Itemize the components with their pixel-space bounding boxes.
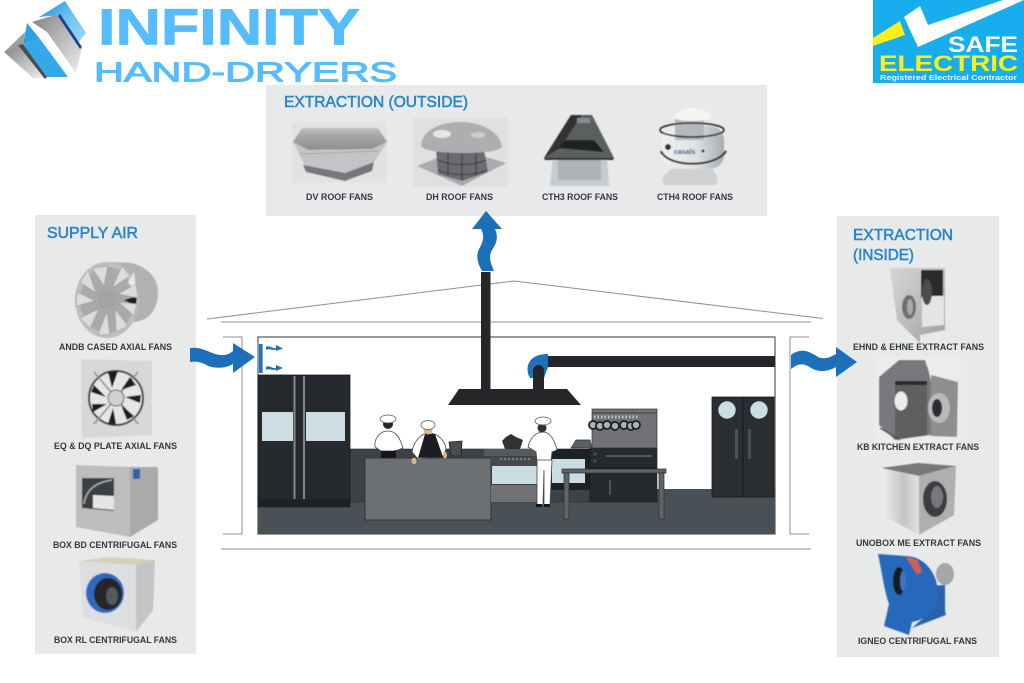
fan: DH roof fan [413, 118, 508, 187]
kettle [449, 441, 462, 456]
fan: Box BD centrifugal [76, 465, 158, 537]
fan: CTH4 roof fan [660, 108, 726, 185]
chef 1 [375, 415, 403, 458]
label: ANDB cased axial fans: ANDB CASED AXIAL FANS [59, 342, 172, 353]
logo wordmark: HAND-DRYERS: HAND-DRYERS [94, 56, 397, 88]
arrow: extraction to outside [472, 211, 502, 271]
panel: extraction outside [266, 85, 767, 216]
heading: supply air: SUPPLY AIR [47, 225, 138, 242]
label: Igneo centrifugal fans: IGNEO CENTRIFUGAL FANS [858, 636, 977, 647]
backsplash with utensils [589, 409, 657, 448]
yellow spark [873, 21, 905, 46]
horizontal extraction duct [547, 356, 775, 367]
stove and oven [484, 449, 538, 502]
fan: Igneo centrifugal [878, 554, 954, 635]
chef 2 [411, 420, 447, 464]
label: EQ and DQ plate axial fans: EQ & DQ PLATE AXIAL FANS [54, 441, 177, 452]
panel: extraction inside [837, 216, 999, 657]
blue duct elbow [528, 354, 548, 378]
kitchen illustration [258, 272, 775, 534]
fan: EQ and DQ plate axial [81, 359, 152, 438]
chef 3 [528, 417, 557, 507]
pot [502, 434, 523, 449]
label: CTH3 roof fans: CTH3 ROOF FANS [542, 192, 618, 203]
label: EHND and EHNE extract fans: EHND & EHNE EXTRACT FANS [853, 342, 984, 353]
back counter [350, 449, 590, 502]
fan: CTH4 roof fan: casals [674, 149, 696, 156]
registered contractor line: Registered Electrical Contractor [880, 73, 1017, 82]
exhaust stack [481, 272, 490, 390]
tick mark [904, 0, 1024, 47]
label: CTH4 roof fans: CTH4 ROOF FANS [657, 192, 733, 203]
countertop appliance [571, 440, 592, 448]
fan: Box RL centrifugal [79, 557, 155, 632]
label: Box BD centrifugal fans: BOX BD CENTRIFUGAL FANS [53, 540, 177, 551]
steel table [562, 469, 666, 519]
logo: Safe Electric [873, 0, 1024, 83]
logo: Infinity Hand-Dryers [4, 0, 397, 88]
label: DV roof fans: DV ROOF FANS [306, 192, 373, 203]
fan: CTH3 roof fan [544, 115, 614, 186]
fan: ANDB cased axial [75, 262, 158, 338]
vertical duct drop [533, 365, 544, 390]
heading: extraction outside: EXTRACTION (OUTSIDE) [284, 94, 468, 111]
label: KB kitchen extract fans: KB KITCHEN EXTRACT FANS [857, 442, 979, 453]
double doors [712, 397, 774, 497]
arrow: supply air in [190, 343, 255, 373]
logo wordmark: INFINITY: INFINITY [98, 0, 360, 56]
fan: KB kitchen extract [875, 356, 961, 443]
label: Box RL centrifugal fans: BOX RL CENTRIFUGAL FANS [54, 635, 177, 646]
extractor hood [448, 389, 581, 405]
label: DH roof fans: DH ROOF FANS [426, 192, 493, 203]
ELECTRIC: ELECTRIC [879, 51, 1018, 76]
label: Unobox ME extract fans: UNOBOX ME EXTRACT FANS [856, 538, 981, 549]
arrow: extraction inside out [791, 347, 857, 377]
SAFE: SAFE [948, 32, 1018, 57]
room outline [258, 337, 775, 534]
cabinet and window right [549, 448, 657, 502]
heading: inside line 2: (INSIDE) [853, 247, 914, 264]
refrigerator [258, 375, 350, 507]
kitchen island [365, 458, 491, 520]
floor [258, 489, 774, 534]
panel: supply air [35, 215, 196, 654]
fan: Unobox ME extract [881, 463, 956, 535]
supply vent bar [259, 344, 263, 373]
fan: EHND and EHNE extract [890, 268, 945, 343]
logo icon: cubes [4, 1, 86, 79]
small supply arrow bottom [266, 365, 283, 371]
building outline [207, 281, 823, 549]
heading: extraction line 1: EXTRACTION [853, 227, 953, 244]
fan: DV roof fan [292, 122, 387, 183]
small supply arrow top [266, 345, 283, 351]
